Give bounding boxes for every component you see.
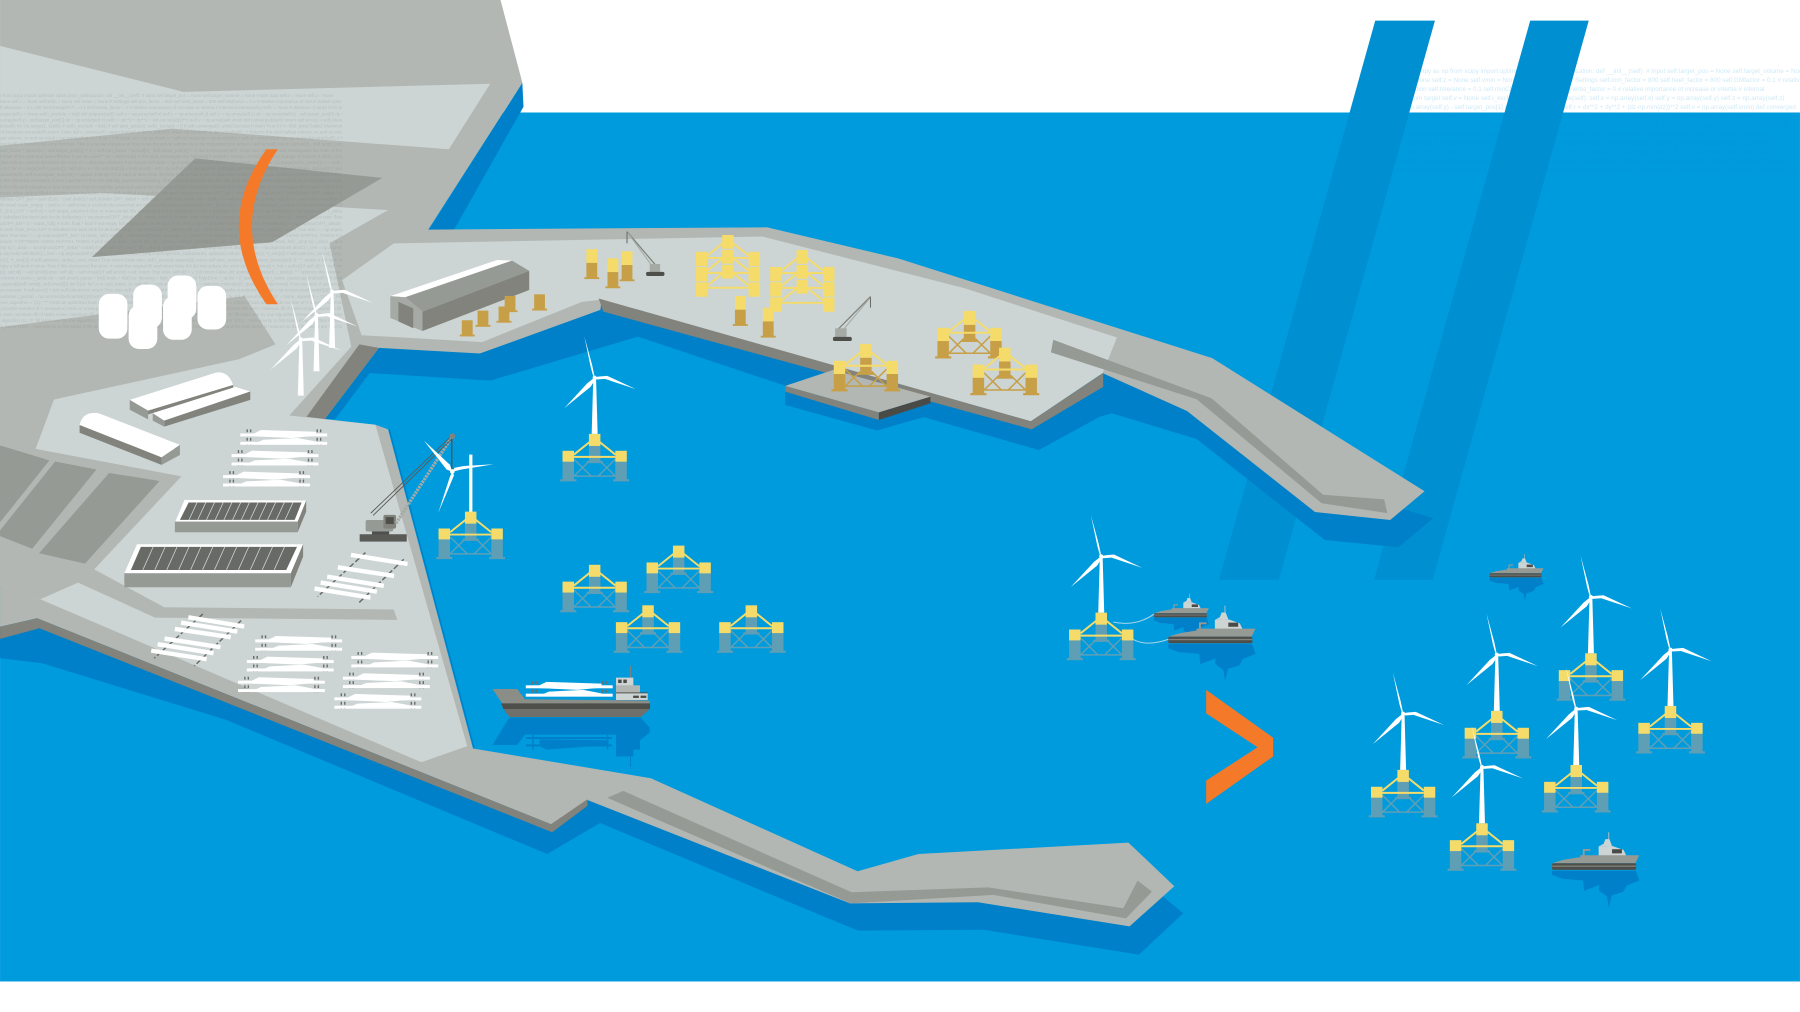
faint code text left: dy = 0.1 for i in range(self.n_tanks()): self.v[i] = v + dv self.dEdC[i] = (self.error() - e0) / dv self.v[i] = v self.update_settings() def take_action(self): self.investigate_actions() # update settings # it is hard to determine: [0, 166, 413, 171]
shadow of north-west shore: [428, 83, 523, 231]
faint code text left: into the idle tank elevation is less important than for stability governed cases the lowest-level tank decreases when tank is filled # Positive error increases when tank is filled # Negative: this tank helps coordinate OPT_bal = (self.dEdC * self.dvdx): [0, 184, 479, 189]
faint code text left: def error(self): # Returns the error function. This is a scalar measure of how close the actual solution is to the requested one actual = self.actual() return (actual[0] - self.target_pos[0]) ** 2 * self.heel_factor: [0, 142, 393, 147]
floating platforms without turbines: [560, 546, 786, 653]
faint code text top right: dy = np.array(self.y) - self.target_pos[1] dz = np.array(self.z) self.r = dx**2 + dy**2 + (dz-np.min(dz))**2 self.v = np.array(self.vmin) def converged: [1393, 104, 1796, 111]
small tug: [1154, 594, 1209, 641]
stacked yellow frames: [696, 235, 834, 312]
turbine under installation: [424, 441, 494, 513]
faint code text left: coordinate OPT_bal = (self.dEdC * (self.dvdx)) / self.dGMdV OPT_debal = self.dEdC * self.dvdx mask_full = (self.v == self.vmax) mask_empty = (self.v == self.vmin) # exclude the ones that are full or empty from consideration in the next step: [0, 196, 469, 201]
floating platform at quay: [436, 512, 505, 559]
faint code text left: empty a full tank # return True if this decreased the error. # reset the original fill and return false if it did not reduce the error e0 = self.error() v_init = self.v[i] if self.v[i] == self.vmax[i]: self.v[i] = self.vmin[i] else: self.v[i] = self.vmax[i]: [0, 263, 446, 268]
east breakwater inner strip: [1051, 340, 1387, 513]
faint code text left: nks vmin: minimum fill of tanks vmax: maximum fill of tanks tv: target volume tx: target x tol: tolerance m algorithm (1), '0': fill tanks one by one algorithm, show: whether to show the results # the tank nearest first trim_factor (100) .. heel priority to first tanks: [0, 312, 497, 317]
barge with blades: [492, 666, 650, 717]
tower stack south: [151, 614, 244, 666]
faint code text top right: can the tank be used to decrease the error # r = absolute distance from target self.dvdx = np.ones(n_tanks) self.dEdV = np.zeros(n_tanks) dv = 0.1: [1393, 167, 1800, 174]
faint code text left: if res.success: if self.error() < (e0-self.tolerance): return True else self.optimize_partial # minimize fill of partially filled tanks oundaries i_partial = np.nonzero(self.partial())[0] set as many tanks as possible to full or empty def solve(x, y, z, vmin, vmax, tv, tx, tol, show=False,: [0, 288, 527, 293]
faint code text left: = np.arg sort(-self.dEdC) i_cen = np.argmax(self.z) tanks = [i_plus, i_min, i_cen] if self.optimize_tanks(tanks, optimize) return True min(2), *i_cen[2]) if self.optimize_tanks(i_cen): return True return False else: self.i_exclude.append(i) return: [0, 251, 463, 256]
small crane east: [833, 297, 870, 341]
small crane north: [627, 232, 664, 276]
component rack small: [175, 500, 306, 532]
faint code text left: take_action(self): self.investigate_actions() # update settings # it is hard to determine the best tank so use a mix of heuristics when the GM (tank elevation) is less important # then for stability governed ballasting, fill the lowest tank first: [0, 172, 452, 177]
background stripes: [1219, 21, 1589, 580]
faint code text left: self.heel_factor * (actual[1] - self.target_pos[1]) ** 2 + self.trim_factor * (actual[2] - self.target_pos[2]) ** 2 def investigate(self): loops over all tanks and investigates the state of the tank and how effective it can be: [0, 148, 406, 153]
west harbour wall: [307, 344, 379, 419]
south quay dark edge: [0, 618, 587, 832]
storage shed 3: [80, 413, 180, 465]
faint code text left: def run(self): for i in range(1, 1000): # self.i_exclude = list() if self.take_action(): self.i_exclude = [] if self.converged(): print('Success') return True if i >= 999: print('Failed: Maximum number of iterations: [0, 123, 385, 128]
faint code text left: _exclude: # OPTIMIZE USING PARTIAL TANKS # pick one to drain, one to fill i_fill, i_drain = self.get_partial(i)[0] i_fill = np.argmax(OPT_bal * mask_full) _emp ty) i_drain = np.argmax(OPT_debal * mask) if self.optimize_pair(i_fill, i_drain): return True: [0, 239, 486, 244]
faint code text left: vmax[i]: self.v[i] = self.vmin[i] else: self.v[i] = self.vmax[i] if self.error() < e0: return True else: self.v[i] = v_init return False def optimize_tanks(self, i_tanks): """ optimize the volume in tanks i_tanks e0 = self.error() guess = list() bnds = list(): [0, 269, 456, 274]
shadow of north quay and east breakwater: [325, 293, 1433, 547]
faint code text top right: import numpy as np from scipy import optimize class Discr_optimization: def __init__(self): # Input self.target_pos = None self.target_volume = None: [1393, 68, 1800, 75]
upper light land band: [0, 46, 490, 149]
faint code text top right: def error(self): # Returns the error function. This is a scalar measure of how close the actual solution is to the requested one actual = self: [1393, 140, 1773, 147]
faint code text left: whole tank if DE_BALLAST: # deballast the best tank for de-ballasting i = np.argmax(OPT_debal) self.v[i] = self.vmin[i] full): if self.optimize_partial(): return True else: i = np.argmax(OPT_bal * (1-mask_full)) self.v[i] = self.vmax[i] self.i_exclude = []: [0, 227, 475, 232]
floating turbine in harbour: [560, 336, 636, 481]
lower right boat: [1552, 832, 1639, 908]
faint code text top right: def run(self): for i in range(1, 1000): # self.i_exclude = list() if self.take_action(): self.i_exclude = [] if self.converged(): print('Success'): [1393, 113, 1761, 120]
land turbines: [270, 250, 373, 396]
storage shed 1: [130, 372, 233, 419]
faint code text top right: self.y = None self.z = None self.vmin = None self.vmax = None # Settings self.trim_factor = 800 self.heel_factor = 800 self.GMfactor = 0.1 # relative: [1393, 77, 1800, 84]
storage shed 2: [153, 387, 250, 427]
faint code text left: = None, algorithm = '(1)': """ Finds an optimized load condition, possible tanks, y position of tanks, z position of tanks, V = Vmax of tank as possible number of V unequal to Vmin or Vmax gives an optimal solution; Align the position of tanks x, y position: [0, 300, 489, 305]
faint code text left: ds.append((self.vmin[i], self.vmax[i])) def E(x): for i,v in zip(i_tanks, x): self.v[i] = v return self.error() res = optimize.minimize(E, guess, bounds=bnds) if res.success: if self.error() < (e0-self.tolerance): return True else: self.optimize_partial # minimize: [0, 282, 483, 287]
parking slots: [0, 445, 160, 564]
tethers to tugs: [1113, 614, 1168, 643]
faint code text left: m algorithm (1), '0': fill tanks one by one algorithm, show: whether to show the results # the tank nearest first trim_factor (100) .. heel priority to first tanks if the tank that is included (ie: first tank) is used the trim factor is applied: [0, 318, 441, 323]
faint code text top right: Maximum number of iterations exceeded') return False def n_tanks(self): return len(self.x) def v_tot(self): return np.sum(self.v) def actual(self):: [1393, 122, 1789, 129]
pontoon: [785, 370, 930, 420]
inner quay edge shadow: [389, 429, 474, 748]
crawler crane: [360, 433, 455, 542]
blade bundles: [223, 429, 438, 710]
faint code text top right: optimization self.tolerance = 0.1 self.minChangePCT = 0.1 self.inertia_factor = 0 # relative importance of increase or intertia # internal: [1393, 86, 1764, 93]
faint code text top right: all tanks the state of the tank and how effective it can be used e0 = self.error() # Per tank, investigate the following dGMdV: change of stability: [1393, 158, 1788, 165]
faint code text top right: tanks from target self.v = None self.i_exclude = list() def prepare(self): self.x = np.array(self.x) self.y = np.array(self.y) self.z = np.array(self.z): [1393, 95, 1784, 102]
mid grey road area: [0, 296, 397, 620]
faint code text top right: Returns the total ballast volume, vx and vy vtotal = np.sum(self.v) vx = 0 vy = 0 if vtotal: ax = np.sum(self.x * self.v) / vtotal ay = np.sum: [1393, 131, 1768, 138]
tan piles near warehouse: [460, 294, 547, 336]
faint code text left: the volume in tanks i_tanks e0 = self.error() guess = list() bnds = list() try: iterating = list(i_tanks) except TypeError: i_tanks = [i_tanks] for i in i_tanks: guess.append(self.v[i]) bnds.append((self.vmin[i], self.vmax[i])) def E(x): for i,v in zip(i_tanks, x):: [0, 276, 476, 281]
faint code text left: == self.vmax) mask_empty = (self.v == self.vmin) # exclude the ones that are full or empty from consideration DE_BALLAST = self.v() > self.target_volume # One or more partial fills are allowed in the optimization of the tanks and the trim: [0, 203, 457, 208]
land frames: [935, 311, 1039, 395]
warehouse: [390, 260, 529, 331]
faint code text left: min(2), *i_cen[2]) if self.optimize_tanks(i_cen): return True return False else: self.i_exclude.append(i) return self.take_action() def optimize_binary(self, i): """ empty a full tank or fill an empty tank and return True if this decreased the error: [0, 257, 461, 262]
faint code text left: max(OPT_bal * (1 - mask_full)) # note: float * bool if not empty full empty tank whole tank if DE_BALLAST: # deballast the best tank for de-ballasting i = np.argmax(OPT_debal) self.v[i] = self.vmin[i] return True else i = np.argmax(OPT_bal): [0, 221, 464, 226]
shadow of south quay and south breakwater: [0, 608, 1183, 955]
north apron: [342, 236, 1117, 421]
land mass: [0, 0, 1425, 926]
chevron arrow: [1206, 690, 1273, 804]
faint code text top right: self.heel_factor * (actual[1] - self.target_pos[1]) ** 2 + self.trim_factor * (actual[2] - self.target_pos[2]) ** 2 def investigate(self): loops over: [1393, 149, 1773, 156]
south breakwater inner strip: [607, 791, 1152, 918]
north quay dark edge: [599, 298, 1103, 429]
faint code text left: oundaries i_partial = np.nonzero(self.partial())[0] set as many tanks as possible to full or empty x, y, z, vmin, vmax, tv, tx, tol, show=False, algn: = None, algorithm = '(1)': """ Finds an optimized load condition, possible tanks, y position of tanks, z position of tanks: [0, 294, 510, 299]
faint code text left: DE_BALLAST = self.v() > self.target_volume # One or more partial fills are allowed in the optimization AST: # deballast the best tank for de-ballasting i = np.argmax(OPT_debal * (1 - mask_empty)) # note: float * bool if not empty tank True: [0, 209, 466, 214]
faint code text left: as possible number of V unequal to Vmin or Vmax gives an optimal solution; Align the position of tanks x, y position of tanks nks vmin: minimum fill of tanks vmax: maximum fill of tanks tv: target volume tx: target x tol: tolerance m algorithm (1), '0': fill tanks one by one: [0, 306, 521, 311]
upper right boat: [1489, 554, 1544, 601]
turbine under tow: [1067, 515, 1142, 660]
faint code text left: can the tank be used to decrease the error # r = absolute distance from target self.dvdx = np.ones(n_tanks) self.dEdV = np.zeros(n_tanks) for i in range(self.n_tanks()): v = self.v[i] self.v[i] = v + dv self.dEdC[i] = (self.error() - e0): [0, 160, 440, 165]
large tug: [1168, 606, 1256, 681]
wind farm: [1369, 556, 1712, 871]
faint code text left: return True else: i = np.argmax(OPT_bal * (1-mask_full)) self.v[i] = self.vmax[i] self.i_exclude = []: return i from actions and _exclude: # OPTIMIZE USING PARTIAL TANKS # pick one to drain, one to fill i_fill, i_drain = self.get_partial(i)[0] i_fill: [0, 233, 469, 238]
frame on pontoon: [831, 344, 900, 391]
tower stack east: [315, 553, 408, 604]
yellow piles: [584, 249, 776, 338]
faint code text left: the state of the tank and how effective it can be used""" e0 = self.error() # Per tank, investigate the following # dGMdV: change of stability due to change of volume # dEdC: change of error due to change of volume: [0, 154, 416, 159]
faint code text left: decreases when tank is filled # Positive error increases when tank is filled # Negative: this tank helps coordinate OPT_bal = (self.dEdC * (self.dvdx)) / self.dGMdV OPT_debal = self.dEdC * self.dvdx mask_full = (self.v == self.vmax) mask_empty: [0, 190, 473, 195]
component rack large: [124, 544, 303, 587]
barge reflection: [492, 717, 650, 767]
white silos: [99, 275, 226, 349]
light yard area: [0, 193, 467, 762]
orange arc: [239, 149, 278, 304]
faint code text left: _emp ty) i_drain = np.argmax(OPT_debal * mask) if self.optimize_pair(i_fill, i_drain): return True i_plus = np.argmax(self.dEdC) i_min = np.argmin(self.dEdC) i_cen = np.argmax(self.z) tanks = [i_plus, i_min, i_cen] if self.optimize_tanks(tanks): return True: [0, 245, 496, 250]
faint code text left: ballast volume, vx and vy vtotal = np.sum(self.v) vx = 0 vy = 0 if vtotal: ax = np.sum(self.x * self.v) / vtotal ay = np.sum(self.y * self.v) / vtotal return ax, ay, vtotal def error(self): # Returns the error function: [0, 136, 392, 141]
faint code text left: trim_factor (100) .. heel priority to first tanks if the tank that is included (ie: first tank) is used the trim factor is applied and the heel factor is reduced so that first tanks are filled before all others in the set of tanks: [0, 324, 408, 329]
faint code text left: when the GM (tank elevation) is less important # then for stability governed ballasting, fill the lowest tank first into the idle tank elevation is less important than for stability governed cases the lowest-level tank decreases when filled: [0, 178, 445, 183]
faint code text left: AST: # deballast the best tank for de-ballasting i = np.argmax(OPT_debal * (1 - mask_empty)) # note: float * bool if not empty tank True max(OPT_bal * (1 - mask_full)) # note: float * bool if not empty full empty tank whole tank if DE_BALLAST:: [0, 215, 466, 220]
dark hardstanding: [92, 158, 382, 257]
